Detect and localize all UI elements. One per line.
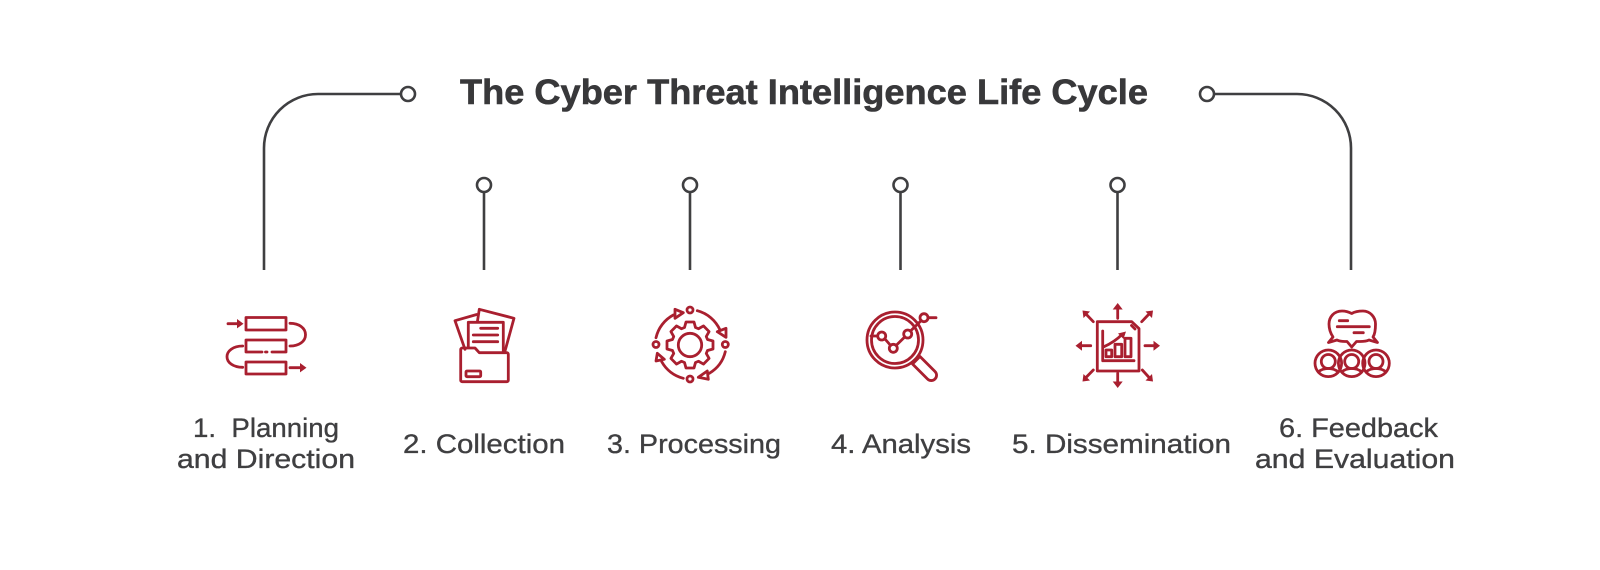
icon: processing gear with cycle (653, 307, 728, 382)
connector: step 2 (477, 178, 491, 270)
icon: folder with documents (455, 309, 514, 382)
connector: left bracket to step 1 (264, 87, 415, 270)
icon: dissemination report with arrows (1076, 303, 1160, 388)
icon: planning flow (227, 318, 306, 374)
title: The Cyber Threat Intelligence Life Cycle (460, 73, 1148, 112)
connector: right bracket to step 6 (1200, 87, 1351, 270)
icon: analysis magnifier with trend line (867, 312, 937, 381)
connector: step 5 (1110, 178, 1124, 270)
icon: feedback speech bubble and people (1315, 311, 1389, 377)
label: step 3: 3. Processing (607, 429, 781, 459)
label: step 1: and Direction (177, 444, 355, 474)
label: step 4: 4. Analysis (831, 429, 971, 459)
label: step 1 (177, 413, 355, 474)
label: step 6 (1255, 413, 1455, 474)
connector: step 4 (894, 178, 908, 270)
label: step 1: 1. Planning (193, 413, 339, 443)
label: step 6: and Evaluation (1255, 444, 1455, 474)
connector: step 3 (683, 178, 697, 270)
label: step 5: 5. Dissemination (1012, 429, 1231, 459)
label: step 6: 6. Feedback (1279, 413, 1439, 443)
label: step 2: 2. Collection (403, 429, 565, 459)
